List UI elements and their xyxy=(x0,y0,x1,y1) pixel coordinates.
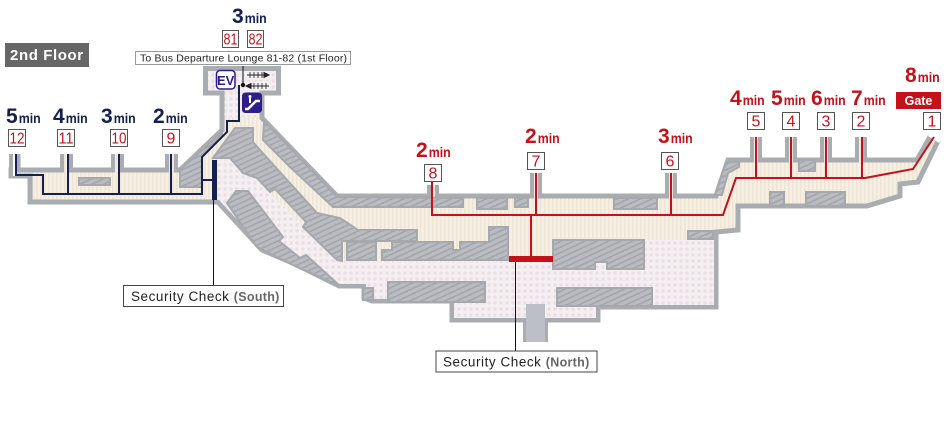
callout: security check north xyxy=(436,351,597,372)
gate numbers: 5 xyxy=(752,114,761,130)
hatched non-public blocks xyxy=(79,121,845,306)
gate numbers: 7 xyxy=(532,154,541,170)
route: north gates (red) xyxy=(432,137,934,258)
gate numbers: 8 xyxy=(429,166,438,182)
callout: security check south xyxy=(124,286,284,306)
icon: elevator: EV xyxy=(217,73,235,88)
floor label: 2nd Floor: 2nd Floor xyxy=(10,47,84,64)
leader: elevator line xyxy=(241,66,245,87)
open end of gate 1 corridor xyxy=(928,131,943,143)
walking times: red: 6min xyxy=(811,87,846,110)
walking times: red: 4min xyxy=(730,87,765,110)
walking times: navy: 4min xyxy=(53,105,88,128)
walking times: red: 8min xyxy=(905,64,940,87)
stairs icon with arrows xyxy=(246,71,269,90)
gate numbers: 12 xyxy=(10,130,25,148)
gate numbers: 10 xyxy=(112,130,127,148)
walking times: navy: 2min xyxy=(153,105,188,128)
leader: security south xyxy=(212,200,214,285)
walking times: navy: 3min xyxy=(232,5,267,28)
walking times: navy xyxy=(6,5,267,128)
callout: bus lounge: To Bus Departure Lounge 81-82 (1st Floor) xyxy=(140,52,347,64)
gate numbers: 81 xyxy=(224,32,238,48)
leader: security north xyxy=(514,262,516,351)
gate numbers: 9 xyxy=(167,130,176,148)
gate label: Gate xyxy=(896,92,941,109)
walking times: navy: 3min xyxy=(101,105,136,128)
gate numbers: 6 xyxy=(666,154,675,170)
terminal floor with outer walls xyxy=(11,68,939,320)
security zone floor xyxy=(217,160,714,318)
walking times: red: 2min xyxy=(416,139,451,162)
gate numbers: 3 xyxy=(822,114,831,130)
gate numbers xyxy=(8,30,940,182)
gate numbers: 1 xyxy=(928,114,937,130)
gate label: Gate: Gate xyxy=(905,94,932,108)
security check north bar xyxy=(509,256,553,262)
floor plan xyxy=(9,68,943,342)
walking times: red: 7min xyxy=(851,87,886,110)
route: south gates (navy) xyxy=(16,85,239,194)
callout: security check south: Security Check (South) xyxy=(131,289,280,304)
lift lobby floor xyxy=(208,71,276,117)
gate numbers: 2 xyxy=(857,114,866,130)
icon: escalator xyxy=(242,92,262,113)
walking times: red: 2min xyxy=(525,125,560,148)
walking times: red: 5min xyxy=(771,87,806,110)
gate stubs xyxy=(9,137,867,342)
floor label: 2nd Floor xyxy=(5,43,89,67)
walking times: navy: 5min xyxy=(6,105,41,128)
walking times: red: 3min xyxy=(658,125,693,148)
gate numbers: 82 xyxy=(248,32,263,48)
security check south bar xyxy=(212,160,217,200)
callout: security check north: Security Check (North) xyxy=(443,354,590,370)
gate numbers: 11 xyxy=(58,130,74,148)
walking times: red xyxy=(416,64,940,162)
gate numbers: 4 xyxy=(787,114,796,130)
